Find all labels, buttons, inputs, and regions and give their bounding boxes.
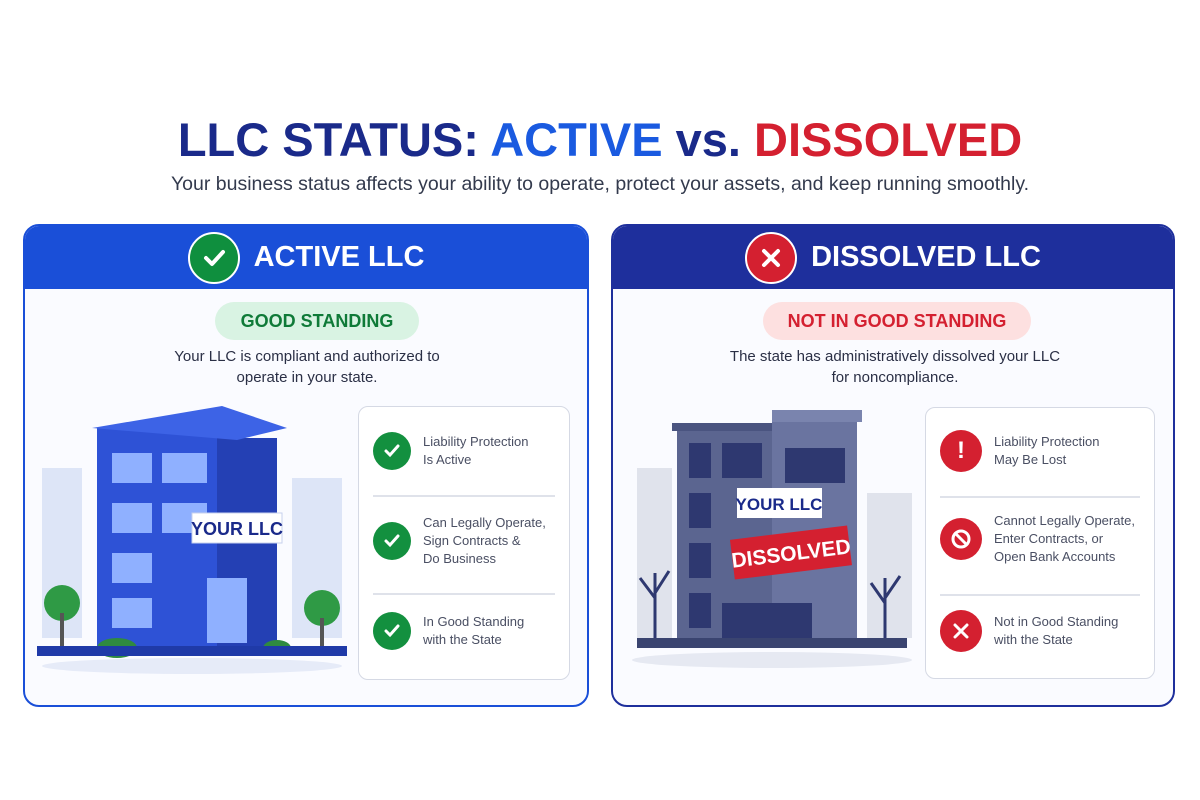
description: The state has administratively dissolved your LLC — [730, 348, 1060, 365]
item: standing: with the State — [423, 632, 502, 647]
description: Your LLC is compliant and authorized to — [174, 348, 440, 365]
item: standing — [373, 612, 524, 650]
header: active — [25, 226, 587, 289]
item: cannot operate: Enter Contracts, or — [994, 531, 1103, 546]
description: operate in your state. — [237, 369, 377, 386]
item: standing: In Good Standing — [423, 614, 524, 629]
item: operate: Do Business — [423, 551, 496, 566]
pill: not in good standing — [763, 302, 1031, 340]
panel: active — [23, 224, 589, 707]
illustration: dissolved building: YOUR LLC — [736, 495, 822, 514]
item: cannot operate — [940, 513, 1135, 564]
item: not in good standing: with the State — [994, 632, 1073, 647]
illustration: active building — [37, 406, 347, 674]
item: liability: Is Active — [423, 452, 471, 467]
item: liability lost: ! — [957, 437, 965, 464]
header: active: ACTIVE LLC — [254, 241, 424, 273]
header: dissolved — [613, 226, 1173, 289]
item: liability — [373, 432, 528, 470]
item: liability: Liability Protection — [423, 434, 528, 449]
item: liability lost: May Be Lost — [994, 452, 1066, 467]
illustration: active building: YOUR LLC — [191, 519, 283, 539]
icon: check — [188, 232, 240, 284]
subtitle: Your business status affects your ability to operate, protect your assets, and keep running smoothly. — [171, 173, 1029, 195]
title: LLC STATUS: ACTIVE vs. DISSOLVED — [178, 113, 1022, 166]
item: cannot operate: Open Bank Accounts — [994, 549, 1115, 564]
pill: good standing: GOOD STANDING — [241, 310, 393, 330]
panel: dissolved — [611, 224, 1175, 707]
pill: good standing — [215, 302, 419, 340]
illustration: dissolved building: DISSOLVED — [730, 535, 852, 573]
description — [730, 348, 1060, 386]
item: cannot operate: Cannot Legally Operate, — [994, 513, 1135, 528]
illustration: dissolved building — [632, 410, 912, 668]
description — [174, 348, 440, 386]
list: active benefits — [358, 406, 570, 680]
item: liability lost: Liability Protection — [994, 434, 1100, 449]
pill: not in good standing: NOT IN GOOD STANDING — [788, 310, 1006, 330]
list: dissolved consequences — [925, 407, 1155, 679]
item: operate — [373, 515, 546, 566]
description: for noncompliance. — [832, 369, 958, 386]
item: operate: Can Legally Operate, — [423, 515, 546, 530]
item: liability lost — [940, 430, 1100, 472]
item: not in good standing: Not in Good Standing — [994, 614, 1118, 629]
item: not in good standing — [940, 610, 1118, 652]
item: operate: Sign Contracts & — [423, 533, 521, 548]
header: dissolved: DISSOLVED LLC — [811, 241, 1041, 273]
icon: x — [745, 232, 797, 284]
